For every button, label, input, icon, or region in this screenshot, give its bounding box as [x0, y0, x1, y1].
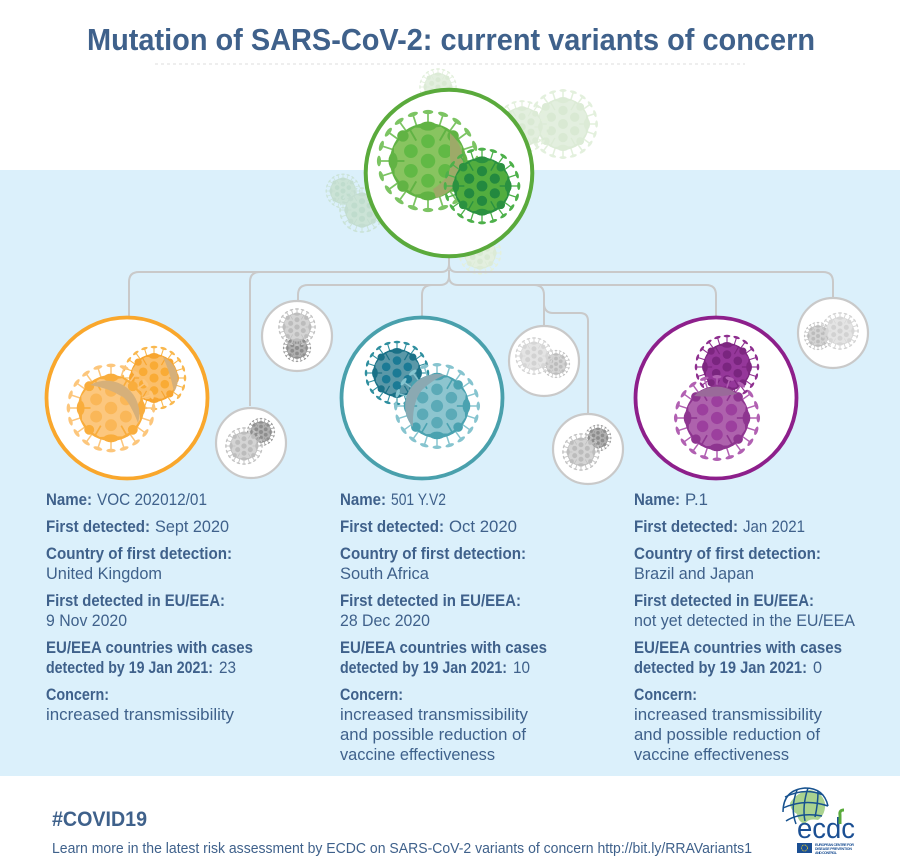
- text block: 501 Y.V2 details: vaccine effectiveness: [340, 745, 495, 764]
- icon: green viruses: [377, 110, 520, 224]
- text block: VOC 202012/01 details: 23: [219, 658, 236, 677]
- text block: VOC 202012/01 details: 9 Nov 2020: [46, 611, 127, 630]
- icon: orange viruses: [67, 346, 186, 452]
- organisation name: DISEASE PREVENTION: [815, 847, 852, 851]
- text block: VOC 202012/01 details: First detected:: [46, 518, 150, 536]
- organisation name: AND CONTROL: [815, 851, 838, 855]
- icon: teal viruses: [365, 341, 480, 449]
- text block: P.1 details: [634, 490, 856, 764]
- text block: 501 Y.V2 details: detected by 19 Jan 2021:: [340, 659, 507, 677]
- text block: P.1 details: not yet detected in the EU/EEA: [634, 611, 856, 630]
- text block: VOC 202012/01 details: increased transmissibility: [46, 705, 235, 724]
- text block: VOC 202012/01 details: VOC 202012/01: [97, 490, 207, 509]
- organisation name: [815, 843, 854, 855]
- hashtag: #COVID19: [52, 808, 147, 831]
- text block: 501 Y.V2 details: Country of first detection:: [340, 545, 526, 563]
- text block: P.1 details: 0: [813, 658, 822, 677]
- text block: 501 Y.V2 details: South Africa: [340, 564, 430, 583]
- text block: 501 Y.V2 details: and possible reduction of: [340, 725, 526, 744]
- text block: 501 Y.V2 details: 10: [513, 658, 530, 677]
- panel: P.1 circle: [636, 318, 796, 478]
- text block: P.1 details: EU/EEA countries with cases: [634, 639, 842, 657]
- text block: VOC 202012/01 details: Sept 2020: [155, 517, 229, 536]
- icon: globe: [783, 787, 828, 829]
- light blue panel: [0, 170, 900, 776]
- minor variant circle E: [798, 298, 868, 368]
- text block: 501 Y.V2 details: Name:: [340, 491, 386, 509]
- text block: P.1 details: Brazil and Japan: [634, 564, 754, 583]
- minor variant circle D: [553, 414, 623, 484]
- text block: P.1 details: increased transmissibility: [634, 705, 823, 724]
- text block: P.1 details: Name:: [634, 491, 680, 509]
- logo: ECDC: [783, 787, 855, 855]
- text block: 501 Y.V2 details: First detected:: [340, 518, 444, 536]
- icon: purple viruses: [674, 335, 760, 461]
- text block: P.1 details: First detected:: [634, 518, 738, 536]
- connector lines: [129, 258, 833, 414]
- faded background viruses: [326, 68, 598, 275]
- EU flag: [797, 843, 812, 853]
- text block: 501 Y.V2 details: 28 Dec 2020: [340, 611, 430, 630]
- logo: ECDC: ecdc: [797, 813, 855, 845]
- minor variant circle B: [262, 301, 332, 371]
- text block: 501 Y.V2 details: Concern:: [340, 686, 403, 704]
- text block: 501 Y.V2 details: Oct 2020: [449, 517, 517, 536]
- text block: VOC 202012/01 details: Country of first detection:: [46, 545, 232, 563]
- text block: VOC 202012/01 details: Concern:: [46, 686, 109, 704]
- text block: P.1 details: Country of first detection:: [634, 545, 821, 563]
- text block: 501 Y.V2 details: increased transmissibility: [340, 705, 529, 724]
- text block: VOC 202012/01 details: EU/EEA countries with cases: [46, 639, 253, 657]
- text block: 501 Y.V2 details: [340, 490, 547, 764]
- text block: 501 Y.V2 details: First detected in EU/EEA:: [340, 592, 521, 610]
- text block: P.1 details: Jan 2021: [743, 517, 805, 536]
- text block: P.1 details: Concern:: [634, 686, 697, 704]
- text block: 501 Y.V2 details: EU/EEA countries with cases: [340, 639, 547, 657]
- text block: VOC 202012/01 details: [46, 490, 253, 724]
- text block: VOC 202012/01 details: First detected in EU/EEA:: [46, 592, 225, 610]
- organisation name: EUROPEAN CENTRE FOR: [815, 843, 854, 847]
- main circle: original virus: [366, 90, 532, 256]
- text block: P.1 details: and possible reduction of: [634, 725, 820, 744]
- text block: VOC 202012/01 details: detected by 19 Jan 2021:: [46, 659, 213, 677]
- text block: VOC 202012/01 details: Name:: [46, 491, 92, 509]
- text block: P.1 details: P.1: [685, 490, 708, 509]
- footer source text: Learn more in the latest risk assessment by ECDC on SARS-CoV-2 variants of concern http://bit.ly/RRAVariants1: [52, 841, 752, 857]
- text block: P.1 details: First detected in EU/EEA:: [634, 592, 814, 610]
- panel: 501 Y.V2 circle: [342, 318, 502, 478]
- text block: 501 Y.V2 details: 501 Y.V2: [391, 490, 446, 509]
- text block: P.1 details: detected by 19 Jan 2021:: [634, 659, 807, 677]
- minor variant circle C: [509, 326, 579, 396]
- title: Mutation of SARS-CoV-2: current variants of concern: [87, 22, 815, 57]
- text block: P.1 details: vaccine effectiveness: [634, 745, 789, 764]
- text block: VOC 202012/01 details: United Kingdom: [46, 564, 162, 583]
- panel: VOC 202012/01 circle: [46, 318, 208, 478]
- minor variant circle A: [216, 408, 286, 478]
